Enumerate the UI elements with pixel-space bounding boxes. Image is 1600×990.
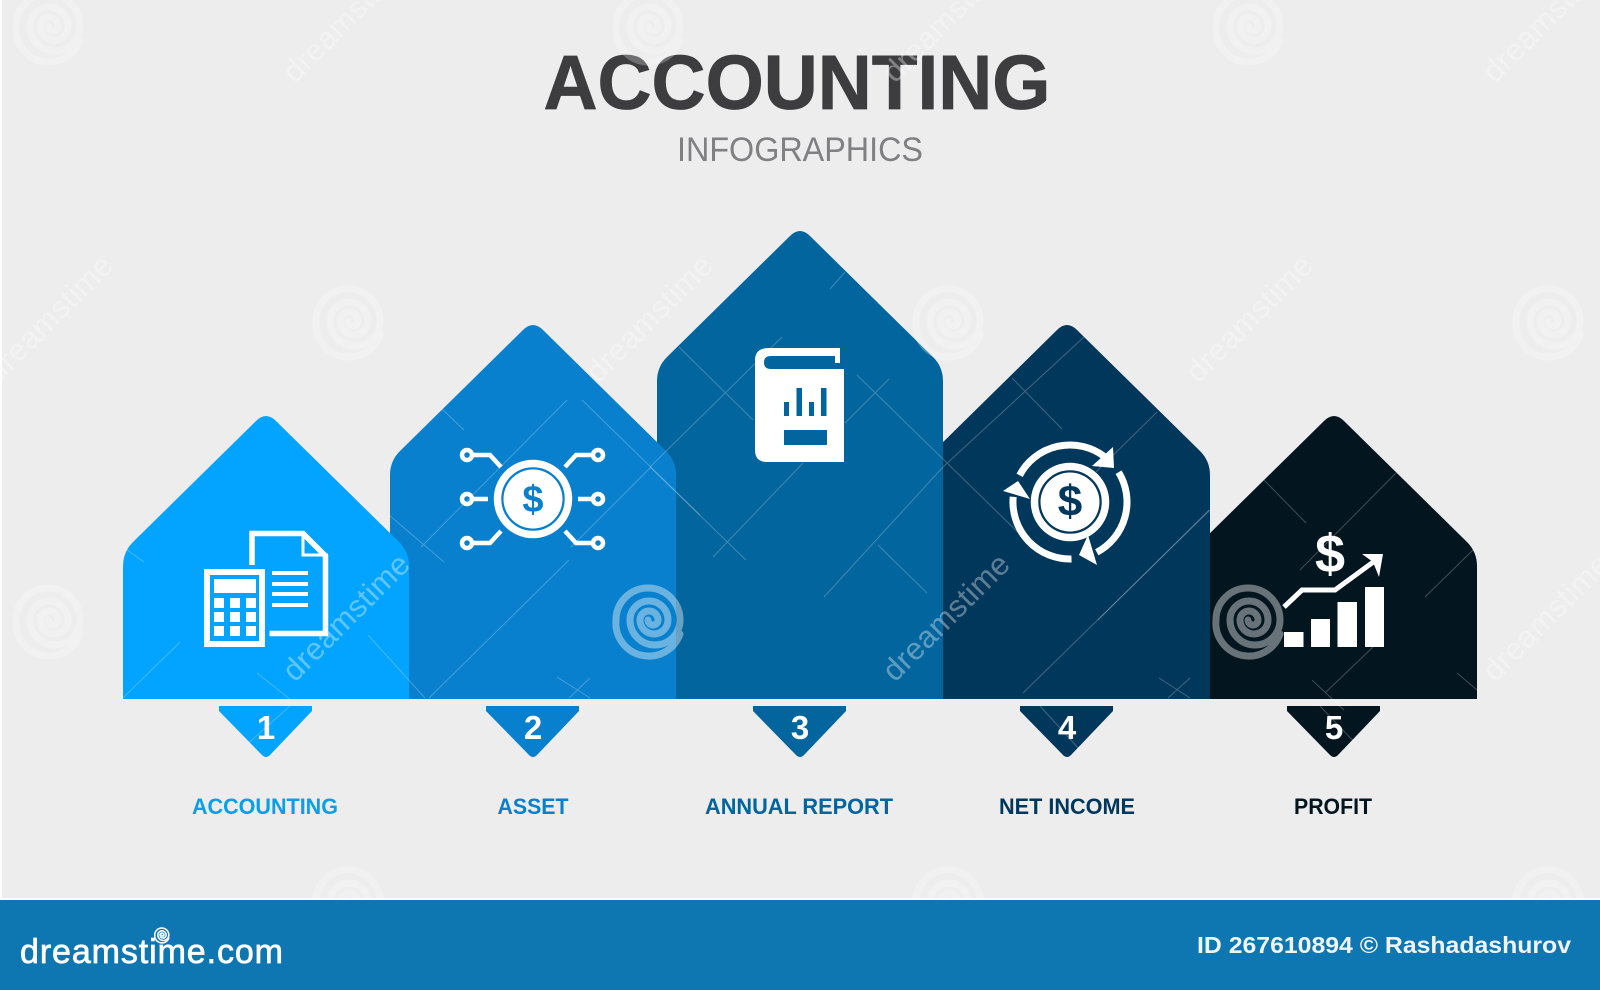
icon: report book with chart [755,348,844,462]
icon: coin with circular arrows: $ [1058,477,1082,526]
label: profit: PROFIT [1294,794,1373,819]
panel: net income arrow shape [924,325,1210,699]
number marker 2: 2 [524,709,542,746]
number marker 1 [219,706,312,757]
panel: profit arrow shape [1191,416,1477,699]
icon: profit growth chart [1284,524,1384,647]
label: annual report: ANNUAL REPORT [705,794,894,819]
number marker 5 [1287,706,1380,757]
panel: annual report arrow shape [657,231,943,699]
subtitle: INFOGRAPHICS [677,131,923,169]
icon: calculator and document [207,531,328,644]
icon: coin with circular arrows [1003,445,1127,565]
number marker 5: 5 [1325,709,1343,746]
number marker 1: 1 [257,709,275,746]
icon: profit growth chart: $ [1315,524,1345,584]
icon: coin with circuit nodes [462,450,603,548]
watermark overlay: dreamstime [1178,248,1320,389]
number marker 2 [486,706,579,757]
watermark overlay: dreamstime [275,547,417,688]
footer band [0,898,1600,990]
panel: asset arrow shape [390,325,676,699]
icon: coin with circuit nodes: $ [522,479,544,521]
label: net income: NET INCOME [999,794,1135,819]
label: asset: ASSET [498,794,569,819]
label: accounting: ACCOUNTING [192,794,338,819]
number marker 3 [753,706,846,757]
number marker 4: 4 [1058,709,1077,746]
watermark overlay: dreamstime [578,248,720,389]
footer credit: ID 267610894 © Rashadashurov [1197,932,1571,958]
panel: accounting arrow shape [123,416,409,699]
title: ACCOUNTING [544,40,1050,126]
footer logo: dreamstime.com [20,933,283,971]
number marker 3: 3 [791,709,809,746]
watermark overlay: dreamstime [875,547,1017,688]
number marker 4 [1020,706,1113,757]
